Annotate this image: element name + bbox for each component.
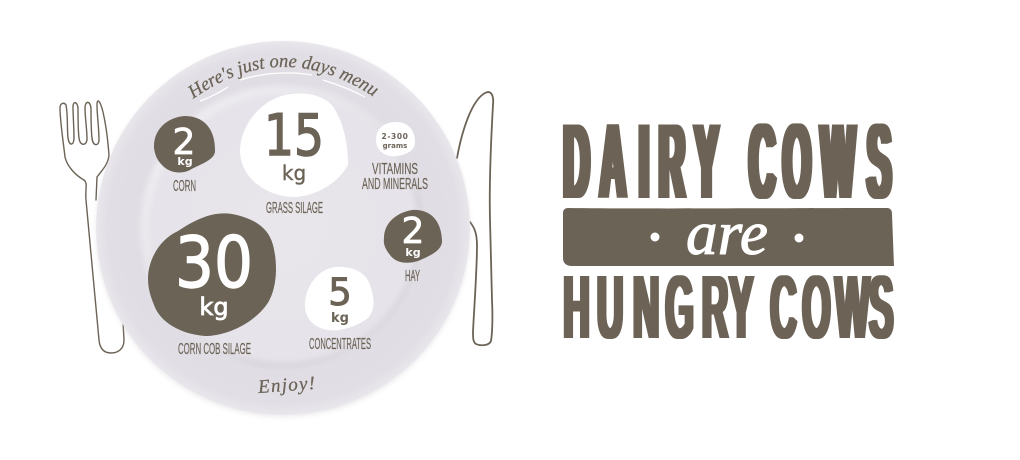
item: hay 2 kg bbox=[384, 210, 442, 285]
item: corn 2 kg: 2 bbox=[173, 122, 195, 163]
item: grass silage 15 kg bbox=[240, 94, 348, 217]
heading: here's just one days menu: Here's just one days menu bbox=[188, 56, 378, 99]
item: hay 2 kg: 2 bbox=[402, 211, 424, 252]
plate bbox=[96, 41, 470, 417]
title line: hungry cows: HUNGRY COWS bbox=[563, 257, 893, 358]
item: vitamins and minerals 2-300 grams: AND MINERALS bbox=[362, 176, 428, 193]
infographic canvas: CONCENTRATES bbox=[309, 336, 371, 353]
item: concentrates 5 kg: 5 bbox=[328, 271, 352, 314]
item: corn 2 kg: kg bbox=[177, 155, 193, 168]
item: corn 2 kg: CORN bbox=[173, 178, 196, 195]
item: corn cob silage 30 kg bbox=[148, 213, 276, 358]
text: enjoy: Enjoy! bbox=[256, 373, 316, 398]
item: vitamins and minerals 2-300 grams bbox=[362, 122, 428, 193]
item: corn cob silage 30 kg: CORN COB SILAGE bbox=[178, 341, 251, 358]
title: dairy cows are hungry cows bbox=[563, 102, 894, 358]
item: hay 2 kg: kg bbox=[405, 246, 421, 259]
item: grass silage 15 kg: GRASS SILAGE bbox=[266, 200, 323, 217]
banner: are bbox=[563, 200, 894, 268]
icon: knife bbox=[457, 92, 493, 345]
item: grass silage 15 kg: kg bbox=[282, 161, 306, 185]
item: vitamins and minerals 2-300 grams: 2-300 bbox=[382, 132, 408, 141]
item: vitamins and minerals 2-300 grams: grams bbox=[383, 142, 407, 150]
item: vitamins and minerals 2-300 grams: VITAMINS bbox=[372, 161, 418, 178]
item: concentrates 5 kg: kg bbox=[331, 311, 349, 326]
item: corn 2 kg bbox=[154, 116, 215, 195]
item: corn cob silage 30 kg: 30 bbox=[175, 222, 253, 304]
title line: dairy cows: DAIRY COWS bbox=[563, 102, 891, 221]
item: hay 2 kg: HAY bbox=[405, 268, 420, 285]
item: corn cob silage 30 kg: kg bbox=[199, 293, 229, 321]
item: concentrates 5 kg bbox=[305, 267, 374, 353]
banner: are: are bbox=[686, 200, 768, 268]
icon: fork bbox=[60, 101, 124, 353]
item: grass silage 15 kg: 15 bbox=[264, 103, 324, 169]
